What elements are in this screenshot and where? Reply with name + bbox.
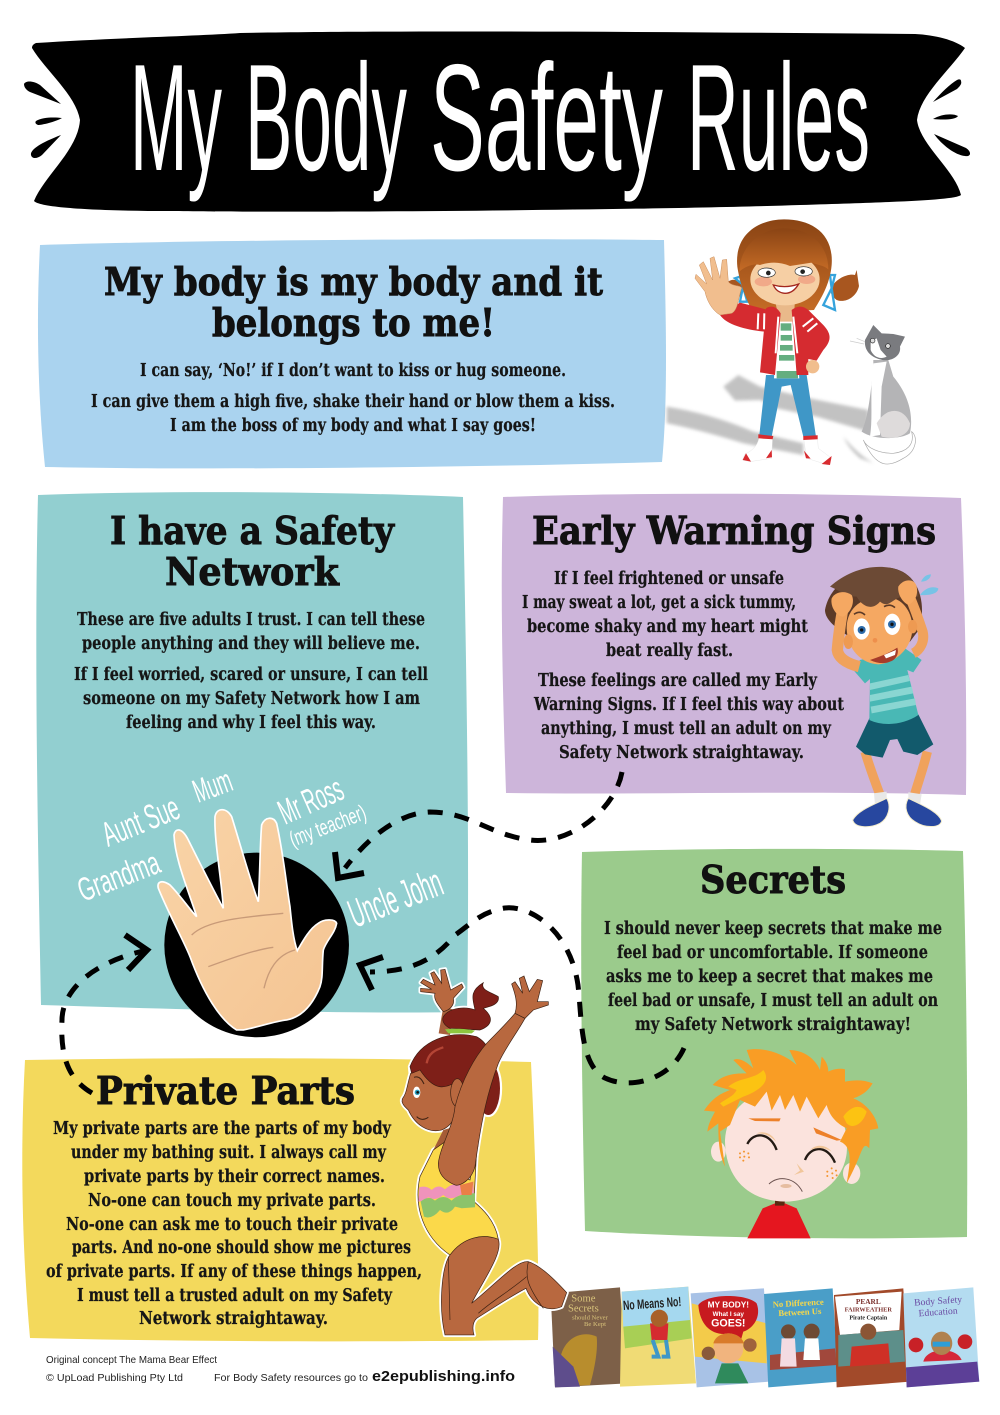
arrow: private parts to hand <box>62 935 147 1093</box>
fist <box>806 360 819 373</box>
cheeks <box>755 277 772 286</box>
book: body safety education <box>903 1287 979 1387</box>
raised left arm <box>439 1007 455 1035</box>
shoes <box>853 798 889 827</box>
illustration: girl and cat <box>667 219 915 465</box>
footer credits: Original concept The Mama Bear Effect <box>46 1354 217 1366</box>
fringe <box>739 228 828 272</box>
fringe <box>830 567 918 607</box>
text block: early warning signs: anything, I must tell an adult on my <box>541 719 832 739</box>
heading: my body <box>104 259 603 345</box>
wavy green stripe <box>421 1193 475 1217</box>
freckles <box>739 1151 838 1179</box>
text block: early warning signs: beat really fast. <box>606 641 733 661</box>
heading: secrets: Secrets <box>700 857 846 902</box>
heading: safety network <box>110 508 395 594</box>
title text: My <box>130 33 222 203</box>
face <box>750 253 820 305</box>
book: my body what I say goes <box>691 1288 769 1387</box>
footer credits: e2epublishing.info <box>372 1368 515 1385</box>
hair back <box>825 568 922 642</box>
text block: early warning signs: become shaky and my heart might <box>527 617 808 637</box>
book: some secrets: Be Kept <box>584 1321 606 1328</box>
arrow: secrets to hand <box>360 908 684 1083</box>
scrunchie <box>445 1029 475 1033</box>
text block: my body: I am the boss of my body and what I say goes! <box>170 416 536 436</box>
ear <box>451 1079 464 1107</box>
mouth <box>773 284 799 293</box>
text block: safety network: someone on my Safety Network how I am <box>83 689 420 709</box>
hand with black circle <box>158 810 349 1037</box>
book covers row <box>551 1287 979 1387</box>
text block: private parts <box>46 1119 422 1329</box>
book: pearl fairweather: Pirate Captain <box>849 1315 888 1321</box>
footer credits: For Body Safety resources go to <box>214 1372 368 1384</box>
arrow: early warning signs to hand <box>335 772 622 878</box>
t-shirt <box>853 648 922 724</box>
names on the fingers: Mr Ross <box>272 769 349 832</box>
neck <box>433 1120 478 1150</box>
red sweater <box>747 1203 811 1238</box>
left hand <box>421 969 463 1012</box>
book: no difference between us: Between Us <box>778 1306 822 1318</box>
bun <box>443 983 498 1030</box>
socks and feet <box>743 435 773 462</box>
text block: early warning signs: If I feel frightened or unsafe <box>554 569 784 589</box>
names on the fingers: Mum <box>188 761 237 810</box>
text block: private parts: No-one can ask me to touch their private <box>66 1215 398 1235</box>
face <box>725 1088 847 1202</box>
text block: early warning signs: I may sweat a lot, get a sick tummy, <box>522 593 796 613</box>
socks <box>874 792 922 805</box>
text block: secrets <box>604 919 942 1035</box>
book: no means no <box>620 1287 696 1387</box>
shorts <box>856 714 933 758</box>
hair back <box>737 219 832 313</box>
text block: safety network: These are five adults I trust. I can tell these <box>77 610 425 630</box>
sweat drops <box>920 574 938 595</box>
book: pearl fairweather <box>834 1288 910 1387</box>
shirt <box>774 322 799 378</box>
illustration: sad child <box>704 1049 878 1238</box>
book: pearl fairweather: FAIRWEATHER <box>845 1307 892 1314</box>
swimsuit <box>418 1137 498 1255</box>
closed eyes <box>747 1135 835 1163</box>
hair back knot <box>477 1062 500 1115</box>
heading: my body: belongs to me! <box>212 300 495 345</box>
text block: early warning signs <box>522 569 844 763</box>
waving hand <box>695 257 742 315</box>
right bun <box>830 270 859 301</box>
text block: safety network: feeling and why I feel this way. <box>126 713 376 733</box>
text block: private parts: under my bathing suit. I always call my <box>71 1143 387 1163</box>
eye <box>413 1087 420 1098</box>
brows <box>748 1118 842 1141</box>
book: no difference between us <box>764 1288 838 1387</box>
heading: private parts: Private Parts <box>96 1068 355 1113</box>
book: body safety education: Education <box>918 1306 958 1319</box>
text block: safety network: If I feel worried, scared or unsure, I can tell <box>74 665 428 685</box>
wavy pink stripe <box>418 1182 474 1202</box>
heading: safety network: I have a Safety <box>110 508 395 553</box>
panel: my body is my body <box>38 239 666 468</box>
book: body safety education: Body Safety <box>914 1294 963 1309</box>
text block: secrets: feel bad or uncomfortable. If someone <box>617 943 928 963</box>
jacket <box>760 307 781 375</box>
raised right arm <box>438 1013 525 1185</box>
text block: early warning signs: These feelings are called my Early <box>538 671 818 691</box>
footer credits: © UpLoad Publishing Pty Ltd <box>46 1372 183 1384</box>
names on the fingers: Grandma <box>72 843 165 909</box>
text block: secrets: asks me to keep a secret that makes me <box>606 967 933 987</box>
text block: private parts: Network straightaway. <box>139 1309 328 1329</box>
panel: early warning signs <box>502 494 966 795</box>
jeans <box>759 375 816 437</box>
book: my body what I say goes: What I say <box>713 1311 744 1318</box>
thigh and shin <box>441 1237 567 1335</box>
arms <box>837 612 859 667</box>
hands <box>831 592 853 617</box>
right hand <box>512 976 548 1018</box>
book: some secrets: Secrets <box>568 1304 599 1315</box>
palm lines <box>192 913 295 988</box>
text block: private parts: My private parts are the parts of my body <box>53 1119 392 1139</box>
text block: private parts: No-one can touch my private parts. <box>88 1191 376 1211</box>
text block: early warning signs: Warning Signs. If I feel this way about <box>533 695 844 715</box>
eyes <box>758 268 775 277</box>
eyes <box>854 618 870 640</box>
title text: Body <box>245 33 407 203</box>
names on the fingers <box>72 761 449 936</box>
left pigtail <box>728 280 743 297</box>
palm <box>158 810 337 1030</box>
names on the fingers: (my teacher) <box>286 800 369 852</box>
text block: private parts: parts. And no-one should show me pictures <box>72 1238 411 1258</box>
text block: private parts: private parts by their correct names. <box>84 1167 385 1187</box>
mouth <box>870 648 898 663</box>
hair highlights <box>720 1070 867 1126</box>
white outline <box>402 969 567 1335</box>
ears <box>711 1142 726 1162</box>
text block: private parts: of private parts. If any of these things happen, <box>46 1262 422 1282</box>
title text <box>130 33 870 203</box>
book: pearl fairweather: PEARL <box>856 1297 881 1306</box>
text block: private parts: I must tell a trusted adult on my Safety <box>77 1286 393 1306</box>
shadows <box>667 375 873 463</box>
title banner <box>24 31 970 212</box>
book: my body what I say goes: GOES! <box>711 1318 745 1330</box>
book: some secrets <box>551 1287 627 1387</box>
text block: early warning signs: Safety Network straightaway. <box>559 743 804 763</box>
text block: my body <box>91 361 615 436</box>
illustration: worried boy <box>825 567 942 827</box>
panel: private parts <box>22 1058 538 1341</box>
book: some secrets: Some <box>571 1294 596 1305</box>
orange hair <box>704 1049 878 1183</box>
book: some secrets: should Never <box>572 1314 609 1321</box>
heading: my body: My body is my body and it <box>104 259 603 304</box>
panel: safety network <box>36 492 468 1013</box>
ribbons <box>735 275 835 310</box>
title text: Safety <box>430 33 663 203</box>
heading: early warning signs: Early Warning Signs <box>532 508 936 553</box>
footer credits <box>46 1354 515 1385</box>
book: no difference between us: No Difference <box>772 1297 824 1309</box>
text block: my body: I can give them a high five, shake their hand or blow them a kiss. <box>91 392 615 412</box>
illustration: jumping girl <box>402 969 567 1335</box>
head <box>402 1063 458 1131</box>
names on the fingers: Aunt Sue <box>96 788 185 854</box>
nose <box>794 1163 804 1175</box>
book: my body what I say goes: MY BODY! <box>708 1300 749 1310</box>
heading: safety network: Network <box>165 549 340 594</box>
hair <box>410 1035 492 1113</box>
text block: my body: I can say, ‘No!’ if I don’t want to kiss or hug someone. <box>140 361 566 381</box>
book: no means no: No Means No! <box>622 1294 682 1313</box>
text block: safety network: people anything and they will believe me. <box>82 634 420 654</box>
panel: secrets <box>581 849 967 1238</box>
text block: secrets: my Safety Network straightaway! <box>635 1015 911 1035</box>
head <box>847 596 912 664</box>
neck <box>775 300 795 325</box>
legs <box>865 752 927 797</box>
text block: safety network <box>74 610 428 733</box>
cat <box>850 325 915 464</box>
frown <box>769 1179 802 1192</box>
names on the fingers: Uncle John <box>342 861 449 936</box>
